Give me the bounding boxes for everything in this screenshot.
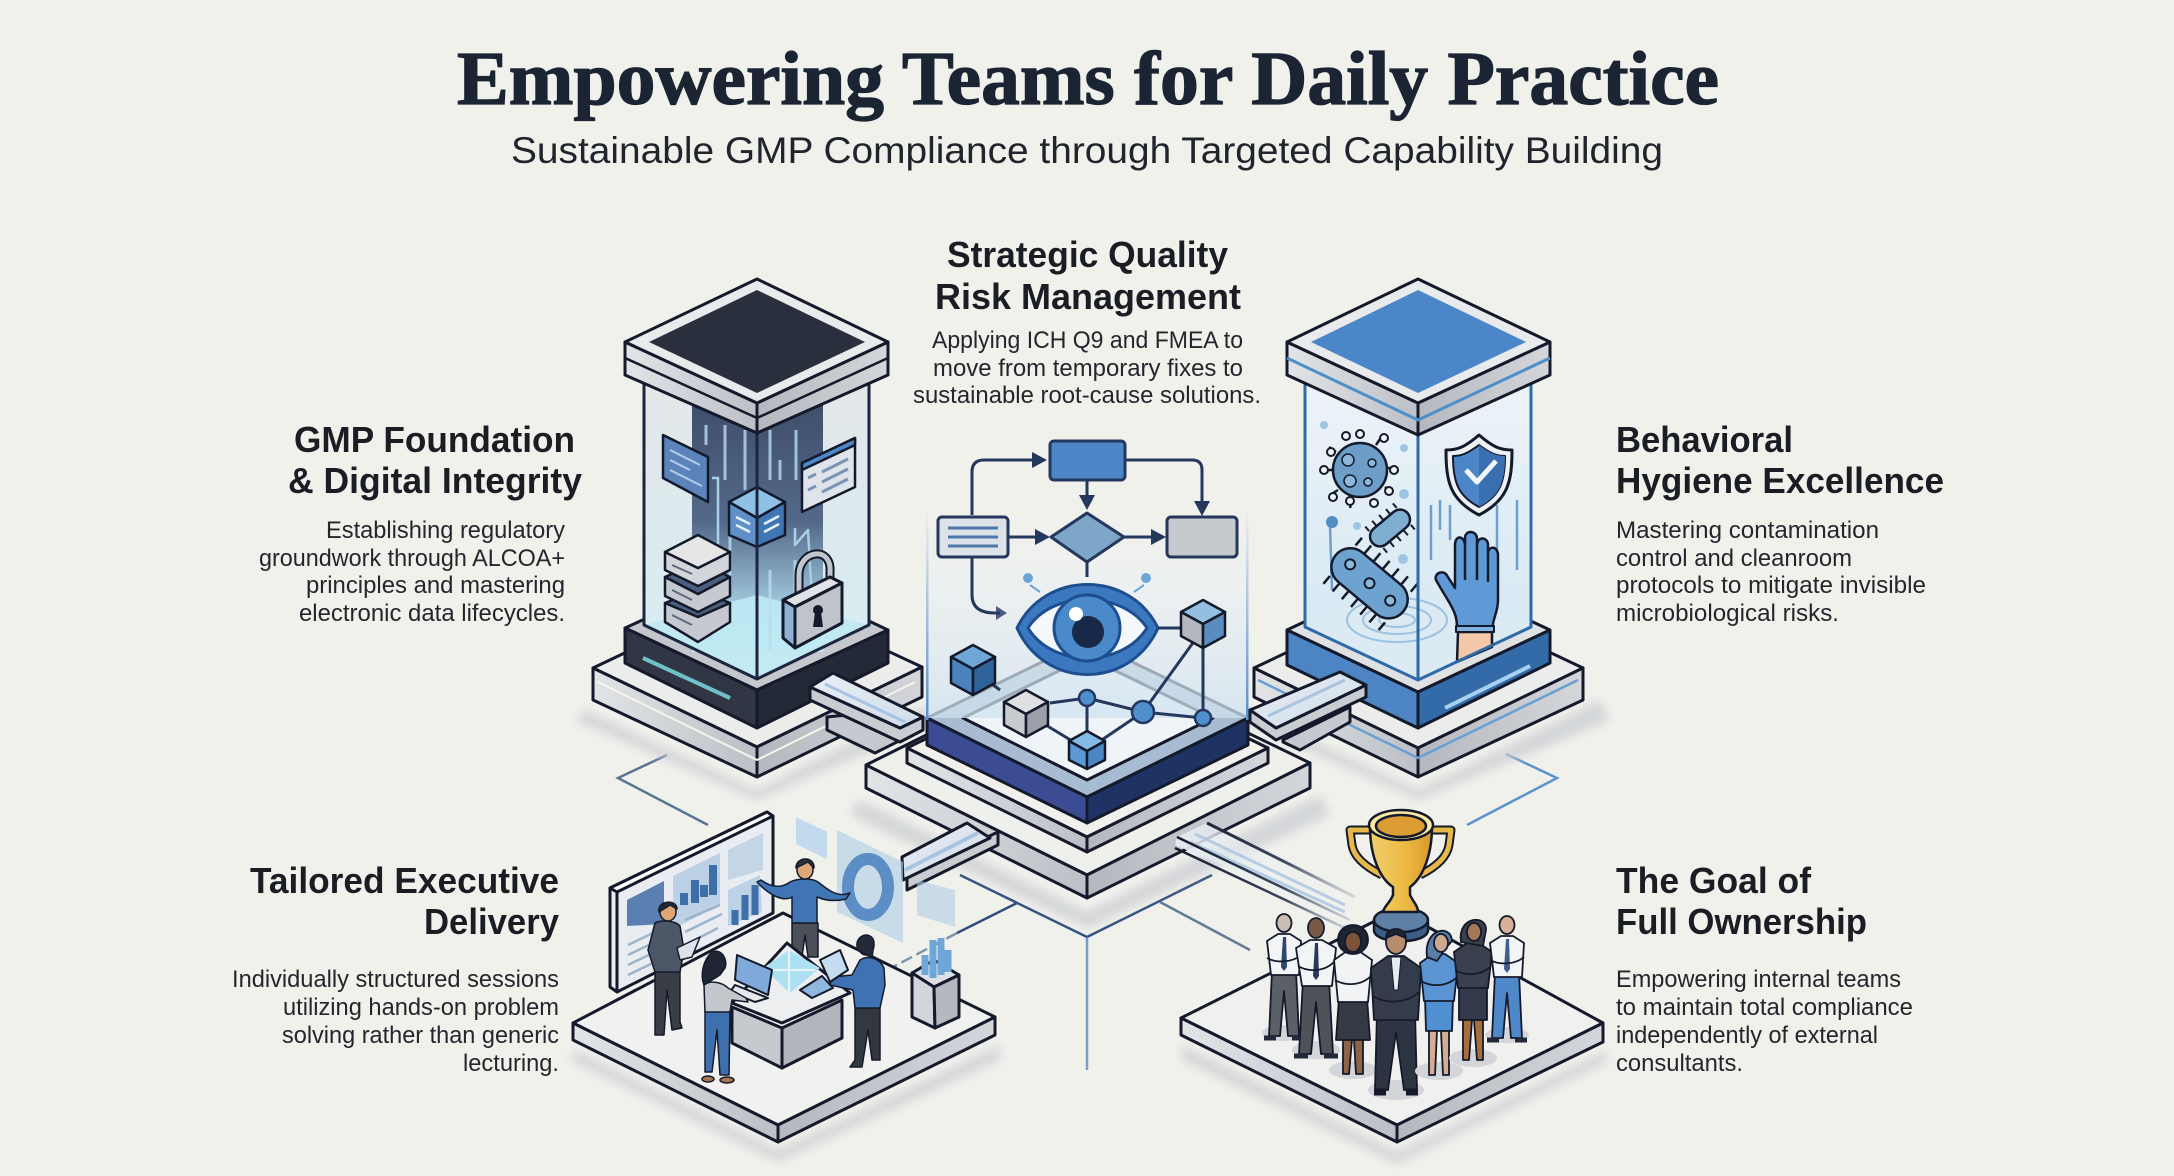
text block: strategic quality risk management	[913, 234, 1261, 409]
description: Mastering contamination	[1616, 517, 1879, 544]
description: Empowering internal teams	[1616, 966, 1901, 993]
person 3	[1329, 925, 1377, 1079]
text block: GMP foundation and digital integrity	[259, 419, 582, 627]
heading: Delivery	[424, 901, 559, 942]
heading: GMP Foundation	[294, 419, 575, 460]
description: groundwork through ALCOA+	[259, 545, 565, 572]
blue base	[1287, 568, 1550, 728]
cube nodes	[951, 600, 1225, 769]
flow box: grey	[1167, 517, 1237, 557]
platform	[573, 913, 995, 1142]
description: utilizing hands-on problem	[283, 994, 559, 1021]
person: woman at laptop	[702, 951, 748, 1083]
heading: & Digital Integrity	[288, 460, 582, 501]
description: Establishing regulatory	[326, 517, 565, 544]
description: move from temporary fixes to	[933, 355, 1243, 382]
heading: Tailored Executive	[250, 860, 559, 901]
heading	[288, 419, 582, 501]
description	[913, 327, 1261, 409]
text block: the goal of full ownership	[1616, 860, 1913, 1077]
text block: behavioral hygiene excellence	[1616, 419, 1944, 627]
person 6	[1449, 920, 1497, 1067]
description	[1616, 966, 1913, 1077]
flow box: list	[938, 517, 1008, 557]
icon: padlock	[783, 554, 842, 648]
person 5	[1415, 931, 1463, 1080]
description	[232, 966, 559, 1077]
circle nodes	[1079, 690, 1211, 726]
tower cap	[1287, 279, 1550, 435]
person 7	[1485, 916, 1529, 1043]
title: Empowering Teams for Daily Practice	[457, 37, 1719, 121]
description: Applying ICH Q9 and FMEA to	[932, 327, 1243, 354]
heading	[1616, 860, 1867, 942]
tower platform	[1254, 590, 1583, 777]
description: solving rather than generic	[282, 1022, 559, 1049]
heading: The Goal of	[1616, 860, 1812, 901]
floor shadows	[570, 700, 1610, 1164]
platform	[1181, 910, 1603, 1142]
tablet on table	[800, 976, 833, 998]
panel: tailored executive delivery platform	[573, 812, 995, 1142]
icon: shield with check	[1446, 435, 1512, 515]
glass case outline	[644, 370, 869, 679]
description: microbiological risks.	[1616, 600, 1839, 627]
person 1	[1262, 914, 1306, 1041]
description: to maintain total compliance	[1616, 994, 1913, 1021]
glass case interior	[644, 370, 869, 679]
floating data panels	[796, 817, 955, 943]
heading: Behavioral	[1616, 419, 1793, 460]
risk network graph	[951, 600, 1225, 769]
icon: gloved hand	[1436, 532, 1498, 662]
description: consultants.	[1616, 1050, 1743, 1077]
description: principles and mastering	[306, 572, 565, 599]
heading	[1616, 419, 1944, 501]
glass backdrop	[926, 507, 1248, 720]
description: sustainable root-cause solutions.	[913, 382, 1261, 409]
dark base	[625, 568, 888, 728]
subtitle: Sustainable GMP Compliance through Targeted Capability Building	[511, 130, 1663, 171]
icon: eye	[1017, 573, 1158, 674]
icon: data cube	[729, 487, 785, 547]
person 4	[1368, 929, 1424, 1100]
description: electronic data lifecycles.	[299, 600, 565, 627]
icon: blue code window	[663, 435, 708, 502]
panel: behavioral hygiene tower	[1254, 279, 1583, 777]
person: man with tablet	[648, 902, 700, 1035]
text block: tailored executive delivery	[232, 860, 559, 1077]
description: Individually structured sessions	[232, 966, 559, 993]
navy base	[927, 640, 1248, 823]
flow decision diamond	[1051, 513, 1124, 562]
heading: Hygiene Excellence	[1616, 460, 1944, 501]
presentation board	[610, 812, 773, 992]
laptop	[730, 955, 772, 1002]
description: control and cleanroom	[1616, 545, 1852, 572]
heading	[935, 234, 1241, 317]
process flowchart	[938, 441, 1237, 620]
icon: small bacterium	[1361, 500, 1419, 556]
meeting table	[730, 943, 850, 1068]
description	[259, 517, 565, 627]
icon: large bacterium	[1317, 532, 1423, 635]
person: man in blue sweater	[820, 935, 885, 1067]
heading: Full Ownership	[1616, 901, 1867, 942]
team of seven professionals	[1262, 914, 1529, 1100]
connector beam: left tower to centre	[810, 673, 923, 753]
icon: server stack	[665, 535, 730, 642]
description	[1616, 517, 1926, 627]
glass case interior	[1305, 370, 1531, 680]
description: independently of external	[1616, 1022, 1878, 1049]
tower platform	[593, 590, 922, 777]
tower cap	[625, 279, 888, 433]
heading: Strategic Quality	[947, 234, 1228, 275]
data pedestal with hologram	[912, 938, 959, 1028]
flow box: top	[1050, 441, 1125, 480]
heading	[250, 860, 559, 942]
connector beam: centre to executive delivery	[902, 823, 998, 890]
person: presenter	[757, 859, 850, 957]
upper platform tier	[907, 660, 1268, 852]
icon: virus	[1320, 430, 1398, 508]
connector lines on floor	[618, 754, 1557, 1070]
glass case outline	[1305, 370, 1531, 680]
description: protocols to mitigate invisible	[1616, 572, 1926, 599]
icon: data window	[802, 438, 855, 512]
connector beam: centre to full ownership	[1175, 823, 1355, 928]
panel: full ownership platform	[1181, 810, 1603, 1142]
connector beam: right tower to centre	[1250, 672, 1366, 750]
lower platform tier	[866, 655, 1310, 898]
description: lecturing.	[463, 1050, 559, 1077]
icon: trophy	[1350, 810, 1451, 941]
panel: GMP foundation tower	[593, 279, 922, 777]
heading: Risk Management	[935, 276, 1241, 317]
person 2	[1292, 918, 1340, 1059]
panel: strategic quality risk management platform	[866, 441, 1310, 898]
